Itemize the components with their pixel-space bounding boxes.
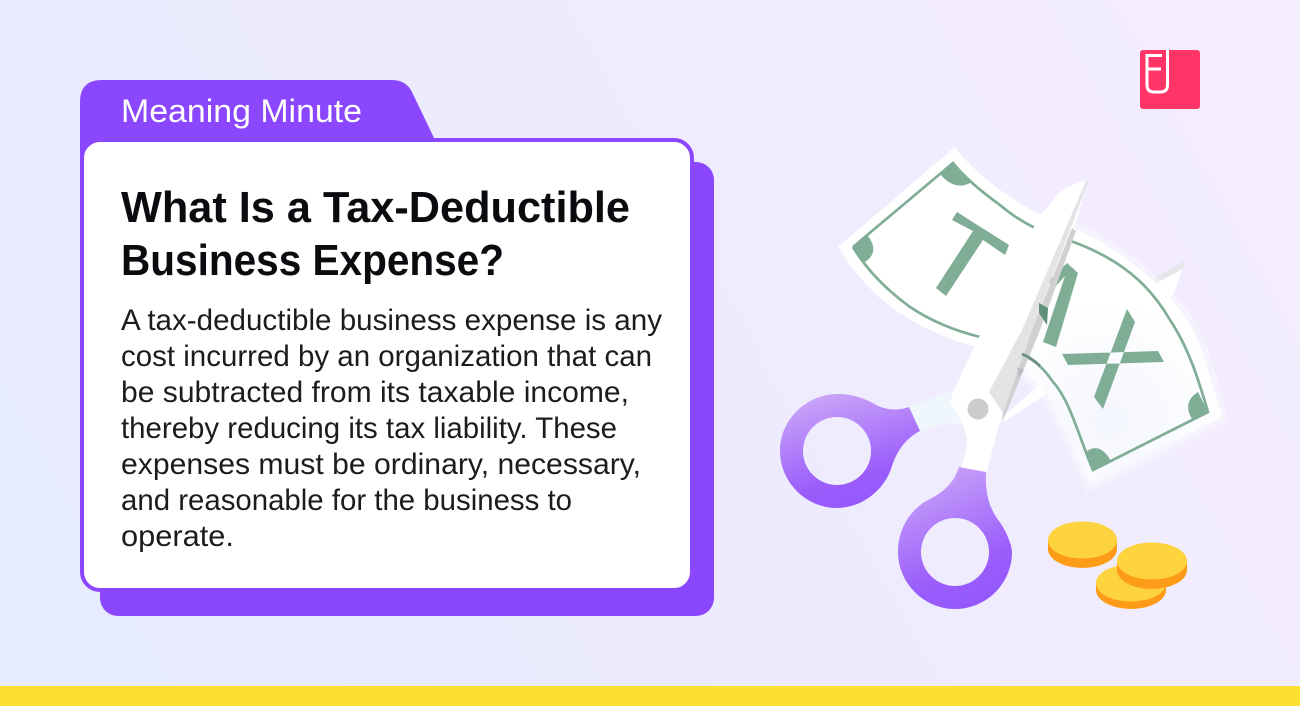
body text: A tax-deductible business expense is any bbox=[121, 304, 662, 337]
coins bbox=[1048, 522, 1187, 609]
pivot screw bbox=[968, 398, 988, 420]
letter A bbox=[1043, 263, 1078, 347]
heading bbox=[121, 183, 630, 285]
tab label: Meaning Minute bbox=[121, 93, 362, 129]
coin bbox=[1117, 561, 1187, 589]
heading: Business Expense? bbox=[121, 236, 504, 285]
body text: and reasonable for the business to bbox=[121, 484, 572, 517]
scissors shank bbox=[950, 388, 1003, 474]
scissors shank glow bbox=[905, 388, 965, 434]
body text: cost incurred by an organization that can bbox=[121, 340, 652, 373]
bill right half bbox=[1000, 228, 1222, 484]
body text: operate. bbox=[121, 520, 234, 553]
illustration: scissors cutting tax bill bbox=[780, 147, 1222, 609]
bill left half bbox=[838, 147, 1042, 347]
folder tab bbox=[80, 80, 435, 165]
coin bbox=[1096, 583, 1166, 609]
body text: be subtracted from its taxable income, bbox=[121, 376, 629, 409]
card shadow bbox=[100, 162, 714, 616]
heading: What Is a Tax-Deductible bbox=[121, 183, 630, 232]
lower scissor blade behind bill bbox=[1000, 262, 1183, 423]
card body bbox=[82, 140, 692, 590]
handle left bbox=[780, 394, 920, 508]
letter X bbox=[1062, 309, 1164, 409]
panel: definition card bbox=[80, 80, 714, 616]
body text: thereby reducing its tax liability. These bbox=[121, 412, 617, 445]
logo bbox=[1140, 50, 1200, 109]
body text: expenses must be ordinary, necessary, bbox=[121, 448, 641, 481]
handle right bbox=[898, 467, 1012, 609]
letter T bbox=[936, 212, 1009, 296]
coin bbox=[1048, 540, 1117, 568]
body text bbox=[121, 304, 662, 553]
yellow footer bar bbox=[0, 686, 1300, 706]
top scissor blade bbox=[950, 180, 1089, 423]
